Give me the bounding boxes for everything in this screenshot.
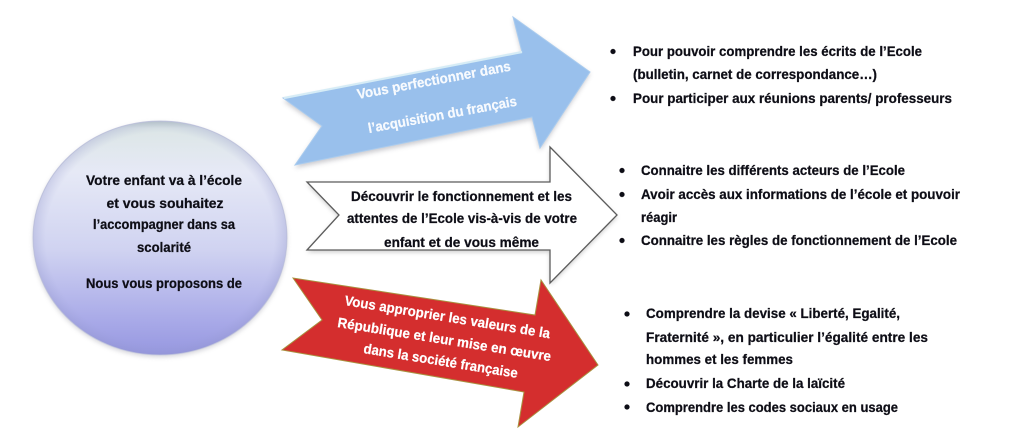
circle text: scolarité xyxy=(137,239,191,255)
red arrow shape xyxy=(282,278,598,427)
text block: school functioning list: Avoir accès aux informations de l’école et pouvoir xyxy=(641,186,961,202)
text block: French language list: (bulletin, carnet de correspondance…) xyxy=(633,66,877,82)
white arrow text: attentes de l’Ecole vis-à-vis de votre xyxy=(347,210,577,226)
text block: republic values list: Découvrir la Charte de la laïcité xyxy=(646,375,845,391)
panel: central circle xyxy=(33,121,287,357)
circle text: l’accompagner dans sa xyxy=(93,216,235,232)
text block: republic values list: Comprendre la devise « Liberté, Egalité, xyxy=(646,305,900,321)
text block: school functioning list: Connaitre les règles de fonctionnement de l’Ecole xyxy=(641,232,957,248)
text block: French language list: Pour pouvoir comprendre les écrits de l’Ecole xyxy=(633,43,922,59)
white arrow text xyxy=(347,188,577,250)
circle text: Nous vous proposons de xyxy=(86,275,242,291)
red arrow text: République et leur mise en œuvre xyxy=(337,314,553,364)
text block: school functioning list: réagir xyxy=(641,209,677,225)
text block: French language list xyxy=(610,43,952,106)
blue arrow text: Vous perfectionner dans xyxy=(356,58,512,102)
circle text: et vous souhaitez xyxy=(106,195,224,211)
text block: school functioning list xyxy=(620,162,961,248)
blue arrow text xyxy=(356,58,518,136)
blue arrow text: l’acquisition du français xyxy=(367,93,518,136)
text block: republic values list: Comprendre les codes sociaux en usage xyxy=(646,399,898,415)
white arrow text: enfant et de vous même xyxy=(384,234,539,250)
text block: French language list: Pour participer aux réunions parents/ professeurs xyxy=(633,90,952,106)
white arrow shape xyxy=(307,147,617,283)
panel: white arrow xyxy=(307,147,617,285)
panel: red arrow xyxy=(282,278,598,427)
red arrow text: dans la société française xyxy=(363,340,519,381)
text block: school functioning list: Connaitre les différents acteurs de l’Ecole xyxy=(641,162,905,178)
text block: republic values list xyxy=(624,305,928,415)
text block: republic values list: Fraternité », en particulier l’égalité entre les xyxy=(646,329,928,345)
red arrow text: Vous approprier les valeurs de la xyxy=(344,292,552,341)
circle shape xyxy=(33,121,287,355)
text block: republic values list: hommes et les femmes xyxy=(646,351,793,367)
white arrow text: Découvrir le fonctionnement et les xyxy=(351,188,572,204)
red arrow text xyxy=(337,292,553,381)
blue arrow shape xyxy=(283,17,590,165)
panel: blue arrow xyxy=(283,17,590,168)
circle text: Votre enfant va à l’école xyxy=(86,172,242,188)
circle text xyxy=(86,172,242,291)
